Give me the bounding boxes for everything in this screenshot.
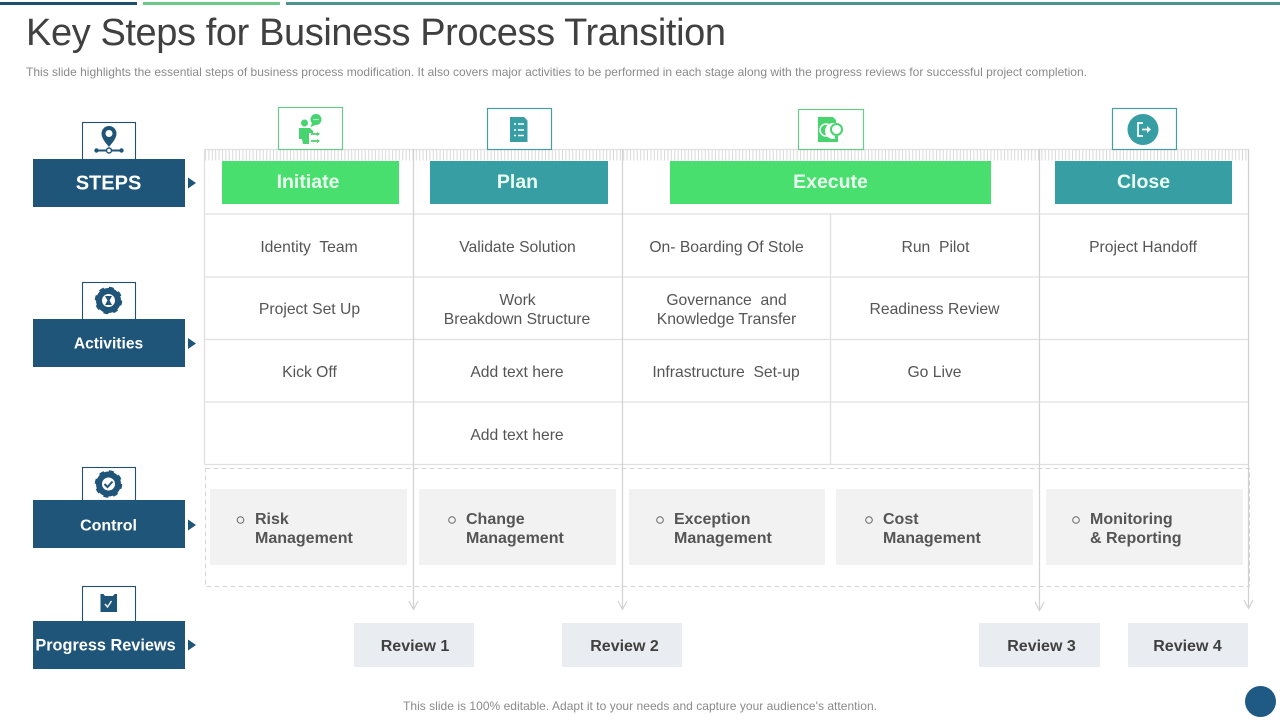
control: Risk Management <box>210 489 407 565</box>
control: Exception Management: Management <box>674 530 772 547</box>
activities: Plan column <box>444 239 591 444</box>
row label: Control <box>33 468 196 548</box>
review 2 <box>562 623 682 667</box>
control: Change Management: Change <box>466 511 525 528</box>
row label: Activities: Activities <box>74 336 143 352</box>
control: Risk Management: Management <box>255 530 353 547</box>
control dashed frame <box>206 468 1250 586</box>
step header: Execute: Execute <box>793 171 868 193</box>
review 1 <box>354 623 474 667</box>
activities: Execute column two <box>870 239 1000 381</box>
activities: Execute column two: Go Live <box>907 364 962 381</box>
review 4: Review 4 <box>1153 638 1222 655</box>
control: Monitoring and Reporting: Monitoring <box>1090 511 1173 528</box>
activities: Plan column: Work <box>499 292 536 309</box>
control: Exception Management: Exception <box>674 511 750 528</box>
activities: Execute column one: Governance and <box>666 292 787 309</box>
review 3: Review 3 <box>1007 638 1076 655</box>
activities: Plan column: Add text here <box>470 364 564 381</box>
activities: Plan column: Add text here <box>470 427 564 444</box>
step header: Initiate: Initiate <box>277 171 340 193</box>
table grid <box>204 150 1248 464</box>
control: Monitoring and Reporting <box>1046 489 1243 565</box>
top accent bars <box>0 2 1280 5</box>
title: Key Steps for Business Process Transition <box>26 12 726 54</box>
step header: Initiate <box>222 161 399 204</box>
review 1: Review 1 <box>381 638 449 655</box>
step header: Plan: Plan <box>497 171 538 193</box>
control: Cost Management: Cost <box>883 511 919 528</box>
activities: Execute column one: On- Boarding Of Stole <box>649 239 804 256</box>
activities: Execute column two: Readiness Review <box>870 301 1000 318</box>
activities: Initiate column: Project Set Up <box>259 301 360 318</box>
step header: Close: Close <box>1117 171 1170 193</box>
step header icon: close <box>1112 108 1176 150</box>
page number badge <box>1245 686 1276 717</box>
activities: Execute column two: Run Pilot <box>901 239 970 256</box>
activities: Initiate column: Identity Team <box>260 239 358 256</box>
activities: Execute column one <box>649 239 804 381</box>
control: Risk Management: Risk <box>255 511 289 528</box>
review 3 <box>979 623 1100 667</box>
control: Cost Management <box>836 489 1033 565</box>
step header: Plan <box>430 161 608 204</box>
activities: Execute column one: Knowledge Transfer <box>657 311 796 328</box>
row label: Activities <box>33 282 196 367</box>
arrows to reviews <box>409 149 1253 610</box>
row label: Progress Reviews: Progress Reviews <box>35 636 176 654</box>
review 4 <box>1128 623 1248 667</box>
activities: Plan column: Validate Solution <box>459 239 576 256</box>
activities: Initiate column <box>259 239 360 381</box>
review 2: Review 2 <box>590 638 659 655</box>
row label: Steps: STEPS <box>76 172 141 194</box>
step header: Close <box>1055 161 1232 204</box>
row label: Progress Reviews <box>33 586 196 669</box>
control: Change Management: Management <box>466 530 564 547</box>
step header icon: initiate <box>278 108 342 150</box>
activities: Plan column: Breakdown Structure <box>444 311 591 328</box>
control: Change Management <box>419 489 616 565</box>
activities: Initiate column: Kick Off <box>282 364 337 381</box>
subtitle: This slide highlights the essential steps of business process modification. It also covers major activities to be performed in each stage along with the progress reviews for successful project completion. <box>26 65 1087 79</box>
activities: Execute column one: Infrastructure Set-up <box>652 364 800 381</box>
step header icon: plan <box>488 108 552 150</box>
row label: Steps <box>33 122 196 207</box>
control: Monitoring and Reporting: & Reporting <box>1090 530 1182 547</box>
step header: Execute <box>670 161 991 204</box>
control: Exception Management <box>629 489 825 565</box>
row label: Control: Control <box>80 518 137 534</box>
step header icon: execute <box>798 110 864 150</box>
activities: Close column: Project Handoff <box>1089 239 1198 256</box>
control: Cost Management: Management <box>883 530 981 547</box>
footer note: This slide is 100% editable. Adapt it to your needs and capture your audience's attention. <box>403 699 877 713</box>
